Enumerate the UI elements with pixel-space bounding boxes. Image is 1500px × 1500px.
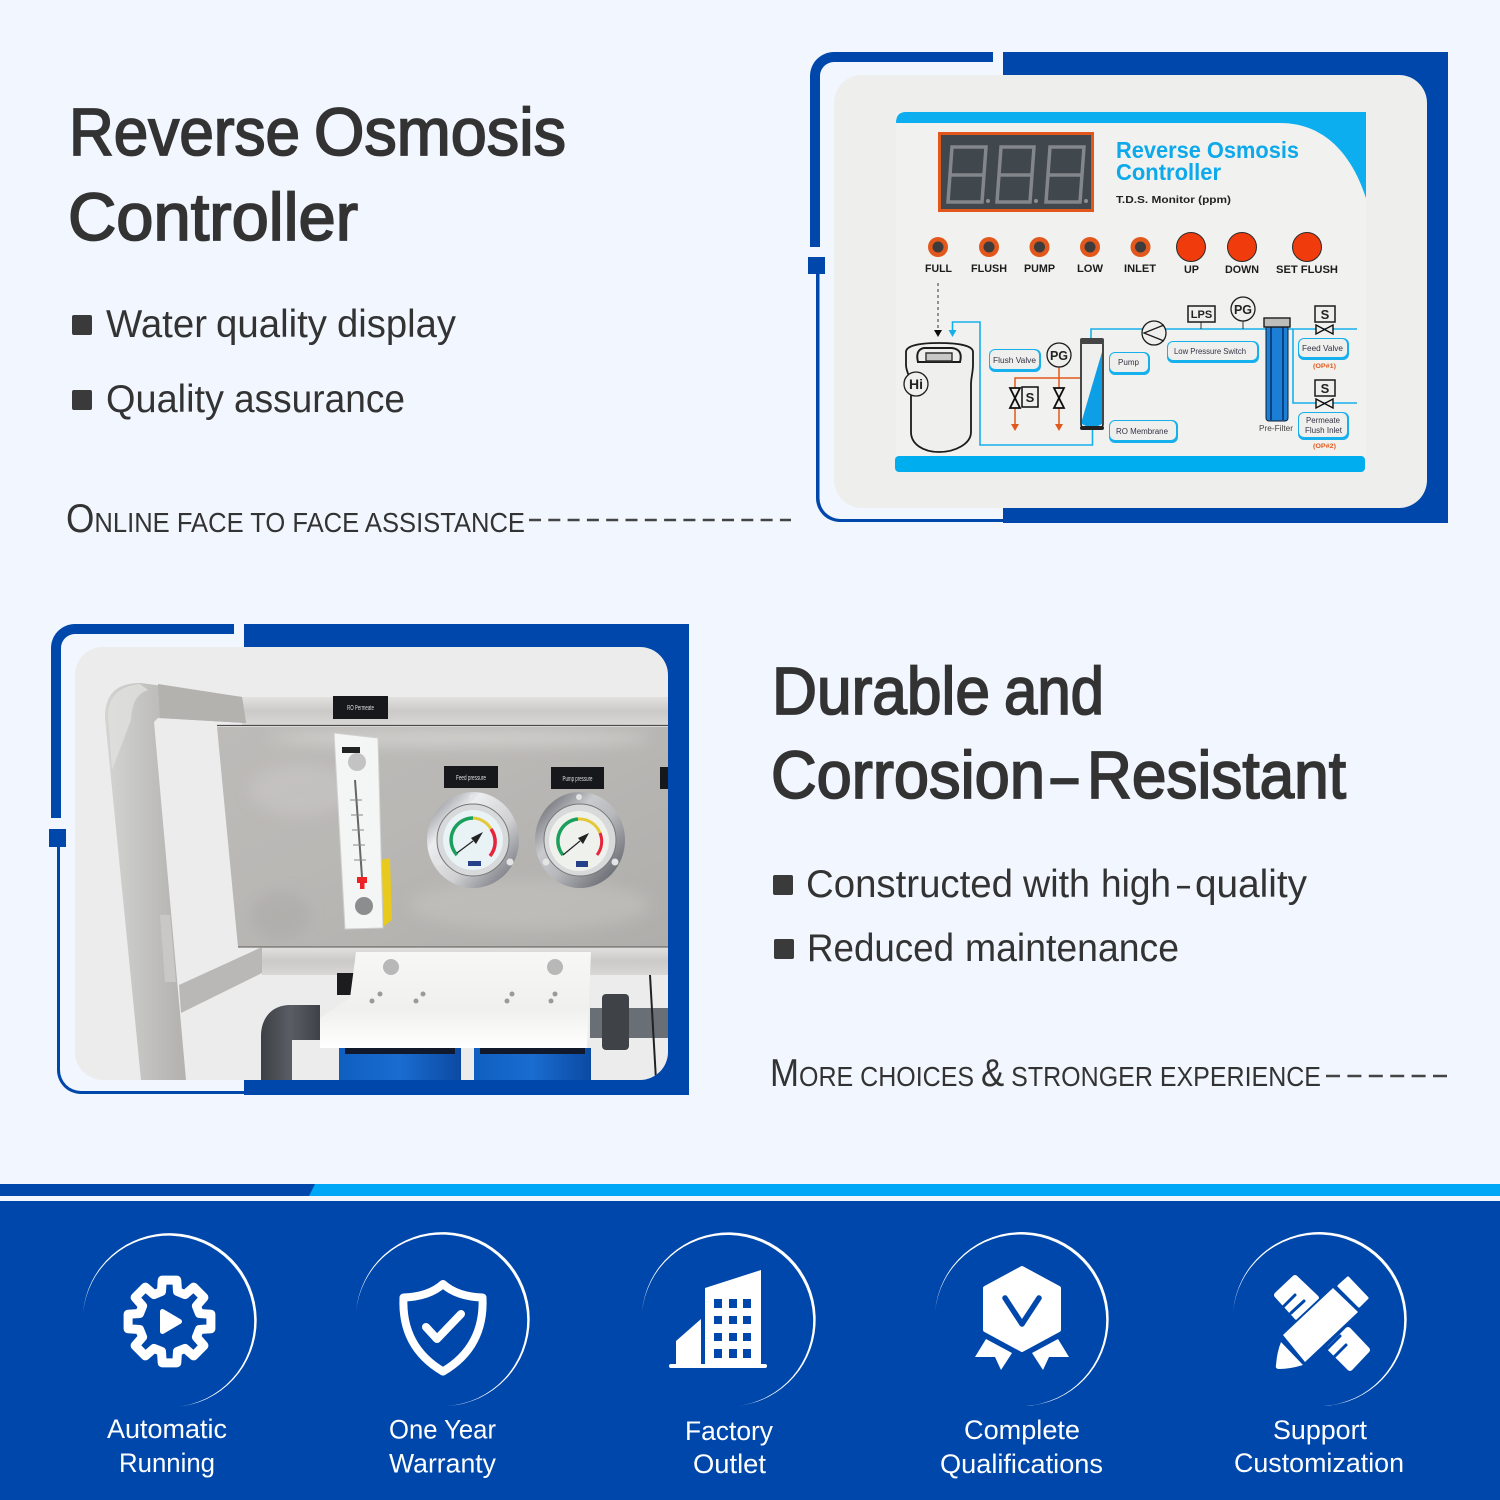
bullet list: controller features: Water: [106, 303, 207, 346]
tagline: online assistance: ONLINE FACE TO FACE ASSISTANCE: [66, 497, 525, 541]
icon: award badge: [975, 1268, 1069, 1370]
gauge label: pump pressure: [551, 767, 604, 789]
solenoid valves: S: [1321, 381, 1330, 396]
section divider band: [0, 1184, 1500, 1196]
gauge label: feed pressure: [444, 766, 498, 788]
frame upright: [105, 683, 246, 1080]
heading: Durable and Corrosion-Resistant: [771, 654, 1346, 813]
heading: Reverse Osmosis Controller: Reverse: [69, 95, 300, 170]
permeate flush inlet label: Permeate: [1306, 416, 1341, 425]
tag: RO Permeate: RO Permeate: [347, 703, 374, 712]
tank: [904, 343, 973, 452]
label: One Year Warranty: One Year: [389, 1414, 496, 1444]
heading: Reverse Osmosis Controller: [68, 95, 566, 255]
controller label: Reverse Osmosis: [1116, 137, 1299, 163]
label: Support Customization: [1234, 1415, 1404, 1478]
panel: stainless frame photo frame: [49, 624, 689, 1095]
label: Support Customization: Support: [1273, 1415, 1367, 1445]
label: Complete Qualifications: Complete: [964, 1415, 1080, 1445]
label: Support Customization: Customization: [1234, 1448, 1404, 1478]
button labels: LOW: [1077, 263, 1104, 275]
pressure gauge symbol left: PG: [1050, 349, 1068, 363]
icon: gear with play: [128, 1280, 211, 1363]
button labels: INLET: [1124, 263, 1156, 275]
icon: pencil and ruler: [1276, 1278, 1367, 1369]
bullet list: controller features: assurance: [234, 378, 405, 421]
pvc union: [590, 975, 668, 1080]
pump label: [1109, 352, 1150, 375]
feed valve label: [1298, 338, 1349, 370]
bullet list: durability features: high: [1101, 863, 1171, 906]
bullet list: durability features: maintenance: [965, 927, 1179, 970]
top rail: [217, 697, 668, 726]
flow meter: [334, 733, 392, 929]
pump label: Pump: [1118, 358, 1140, 367]
icon: shield with check: [403, 1284, 483, 1372]
indicator LEDs: [928, 237, 1150, 257]
feature: Automatic Running: [83, 1233, 257, 1478]
button labels: FULL: [925, 263, 952, 275]
white mounting bracket: [320, 952, 591, 1048]
pressure gauge 1: [427, 792, 519, 888]
low pressure switch: LPS: [1191, 309, 1212, 321]
feature: Complete Qualifications: [935, 1232, 1109, 1479]
bullet list: controller features: [72, 303, 456, 421]
bullet list: durability features: Reduced: [807, 927, 954, 970]
bullet list: controller features: quality: [216, 303, 327, 346]
button labels: UP: [1184, 264, 1199, 276]
RO membrane label: RO Membrane: [1116, 427, 1169, 436]
seven segment display: [940, 134, 1092, 210]
label: Factory Outlet: Factory: [685, 1416, 773, 1446]
bullet list: durability features: quality: [1195, 863, 1307, 906]
pre-filter: [1259, 318, 1293, 433]
button labels: SET FLUSH: [1276, 264, 1338, 276]
tank: Hi: [909, 376, 923, 392]
feature: Factory Outlet: [642, 1232, 816, 1479]
heading: Durable and Corrosion-Resistant: and: [1004, 654, 1104, 729]
button labels: [925, 263, 1338, 276]
solenoid valves: S: [1321, 307, 1330, 322]
RO membrane label: [1109, 420, 1178, 443]
permeate flush inlet label: [1298, 412, 1349, 450]
label: Factory Outlet: [685, 1416, 773, 1479]
panel: stainless steel frame photo: [75, 647, 670, 1080]
label: Complete Qualifications: Qualifications: [940, 1449, 1103, 1479]
controller label: Controller: [1116, 159, 1221, 185]
pressure gauge symbol right: PG: [1234, 303, 1252, 317]
top cyan band: [896, 112, 1366, 198]
bullet list: durability features: –: [1177, 863, 1190, 906]
button labels: FLUSH: [971, 263, 1007, 275]
label: Automatic Running: Automatic: [107, 1414, 227, 1444]
bullet list: durability features: with: [1022, 863, 1090, 906]
steel back panel: [217, 727, 668, 947]
bullet list: controller features: display: [337, 303, 456, 346]
filter housings: [339, 1048, 591, 1080]
flush valve label: Flush Valve: [993, 356, 1037, 365]
bullet list: controller features: Quality: [106, 378, 224, 421]
feature: Support Customization: [1233, 1232, 1407, 1478]
pre-filter: Pre-Filter: [1259, 423, 1293, 433]
orange drain lines and valves: S: [1026, 390, 1035, 405]
label: One Year Warranty: Warranty: [389, 1448, 496, 1478]
water system schematic: [904, 283, 1357, 452]
pressure gauge symbol right: [1231, 297, 1255, 329]
pressure gauge 2: [535, 792, 625, 888]
permeate flush inlet label: (OP#2): [1313, 443, 1336, 450]
pvc elbow pipe: [261, 1005, 320, 1080]
bullet list: durability features: Constructed: [806, 863, 1013, 906]
icon: factory building: [669, 1270, 767, 1368]
label: One Year Warranty: [389, 1414, 496, 1478]
bullet list: durability features: [773, 863, 1307, 970]
heading: Reverse Osmosis Controller: Controller: [68, 180, 358, 255]
flush valve label: [989, 349, 1041, 372]
bottom cyan band: [895, 456, 1365, 472]
diagonal brace: [179, 947, 262, 1013]
button labels: DOWN: [1225, 264, 1259, 276]
label: Automatic Running: [107, 1414, 227, 1478]
button labels: PUMP: [1024, 263, 1055, 275]
tag: RO Permeate: [333, 696, 388, 719]
panel: controller face: [834, 75, 1427, 508]
controller label: [1116, 137, 1299, 206]
controller label: T.D.S. Monitor (ppm): [1116, 194, 1231, 206]
tagline: more choices: MORE CHOICES & STRONGER EXPERIENCE: [770, 1052, 1321, 1095]
gauge label: pump pressure: Pump pressure: [562, 776, 593, 783]
panel: controller photo frame: [808, 52, 1448, 523]
feature: One Year Warranty: [356, 1232, 530, 1478]
low pressure switch: [1167, 306, 1259, 363]
label: Automatic Running: Running: [119, 1448, 215, 1478]
low pressure switch: Low Pressure Switch: [1174, 347, 1246, 356]
feed valve label: Feed Valve: [1302, 344, 1344, 353]
bottom rail: [238, 947, 668, 975]
heading: Durable and Corrosion-Resistant: Durable: [772, 654, 990, 729]
label: Factory Outlet: Outlet: [693, 1449, 766, 1479]
heading: Durable and Corrosion-Resistant: Corrosion: [771, 738, 1045, 813]
pump symbol: [1142, 321, 1166, 345]
push buttons: [1176, 232, 1322, 262]
feed valve label: (OP#1): [1313, 363, 1336, 370]
label: Complete Qualifications: [940, 1415, 1103, 1479]
RO membrane: [1080, 338, 1104, 430]
permeate flush inlet label: Flush Inlet: [1305, 426, 1343, 435]
gauge label: feed pressure: Feed pressure: [456, 775, 486, 782]
heading: Reverse Osmosis Controller: Osmosis: [314, 95, 566, 170]
heading: Durable and Corrosion-Resistant: Resistant: [1087, 738, 1346, 813]
orange drain lines and valves: [1010, 367, 1080, 431]
footer panel: [0, 1201, 1500, 1500]
heading: Durable and Corrosion-Resistant: –: [1051, 738, 1079, 813]
solenoid valves: [1315, 306, 1335, 408]
pressure gauge symbol left: [1047, 343, 1071, 367]
black cable behind bracket: [337, 973, 354, 995]
